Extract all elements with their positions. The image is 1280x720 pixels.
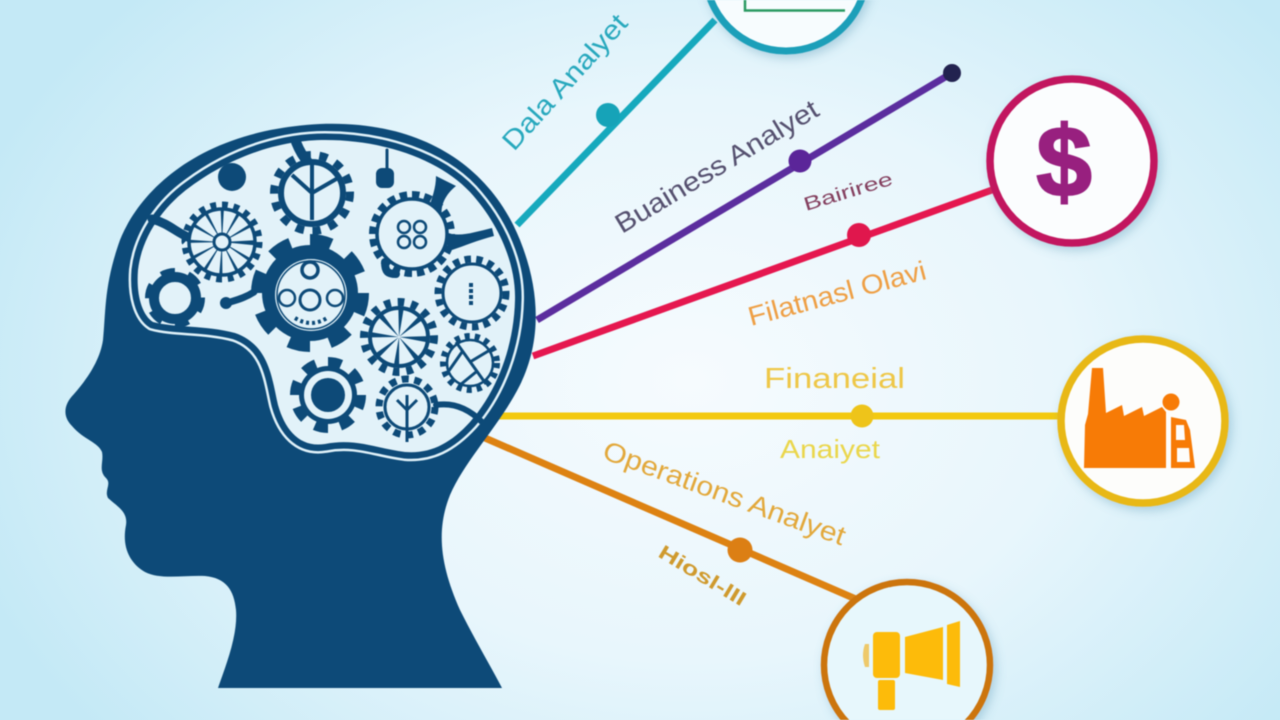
gear: ring bottom [296, 363, 360, 427]
icon: factory [1084, 368, 1195, 468]
gear: right [438, 259, 506, 327]
node: megaphone circle [824, 582, 990, 720]
connector: financial analyst line [498, 404, 1060, 428]
gear: tree bottom [379, 379, 435, 442]
gear: spoked upper left [185, 205, 259, 279]
connector: data analyst line [517, 20, 715, 225]
icon: megaphone [863, 621, 960, 710]
gear: top centre [274, 155, 350, 231]
gear: spoked lower middle [364, 302, 434, 372]
circuit branches [152, 142, 482, 422]
label: data analyst: Dala Analyet [496, 8, 634, 156]
label: analyst: Anaiyet [780, 434, 881, 464]
brain interior with gears [138, 140, 515, 452]
brain outline rim [138, 140, 515, 452]
label: business small: Bairiree [801, 169, 895, 216]
circuit wedge upper right [428, 176, 494, 250]
label: financial: Finaneial [764, 363, 905, 395]
gear: upper right with brain [373, 195, 451, 273]
brain dots [218, 163, 394, 309]
connector: operations analyst line [485, 438, 858, 600]
gear: leaf shaped [443, 336, 497, 390]
connector: business analyst line [537, 64, 961, 320]
label: operations small: Hiosl-lII [654, 541, 750, 611]
head silhouette [65, 124, 536, 688]
gear: large centre [260, 243, 360, 343]
label: finance: Filatnasl Olavi [745, 255, 929, 332]
node: dollar circle [990, 79, 1154, 243]
connector: finance line [533, 190, 992, 356]
icon: dollar sign: $ [1036, 106, 1092, 218]
node: factory circle [1061, 339, 1225, 503]
icon: chart frame [745, 0, 845, 10]
brain outline gap [138, 140, 515, 452]
gear: solid lower left [150, 273, 200, 323]
label: operations analyst: Operations Analyet [599, 435, 850, 551]
label: business analyst: Buainess Analyet [610, 94, 824, 239]
node: data analyst chart icon circle [705, 0, 867, 51]
